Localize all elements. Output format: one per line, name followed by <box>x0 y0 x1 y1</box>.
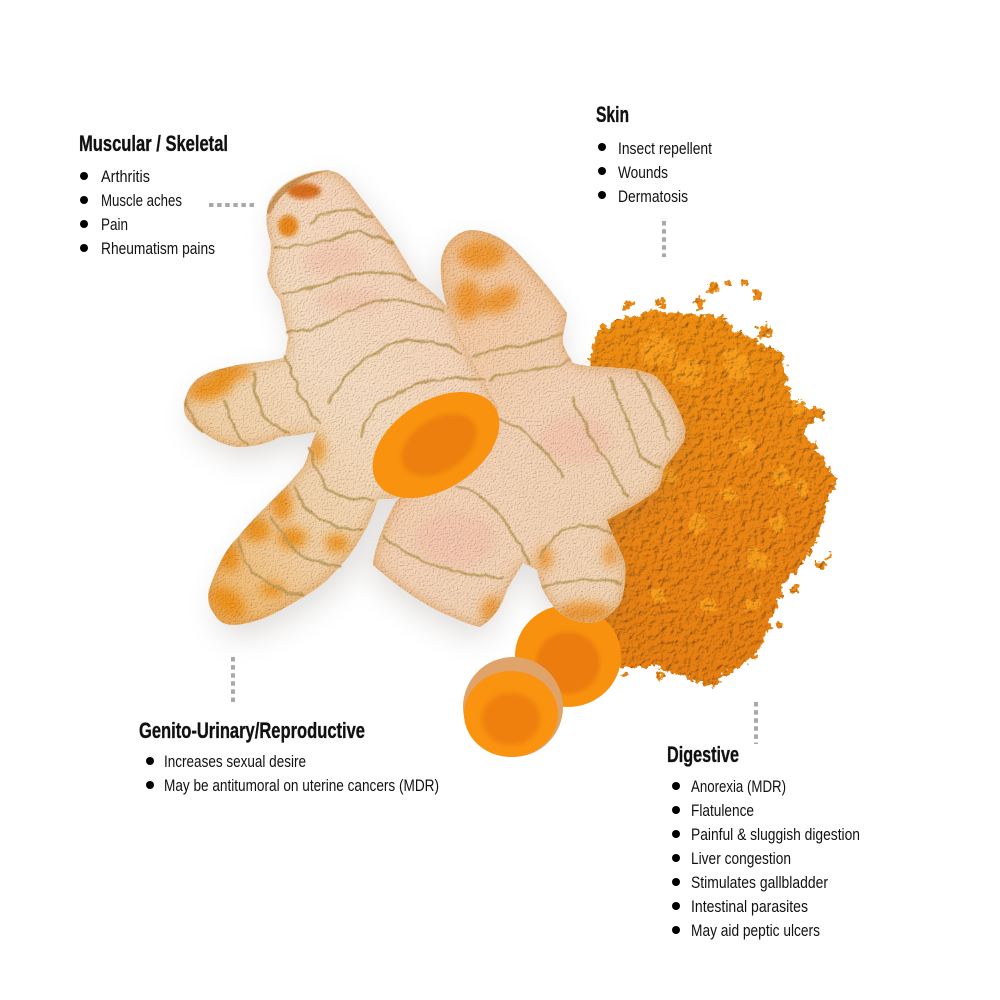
top spots <box>267 171 327 237</box>
connector: genito-urinary <box>231 657 235 702</box>
connector: muscular <box>209 203 254 207</box>
list: digestive items: Liver congestion <box>691 849 791 868</box>
list: genito-urinary items <box>146 752 439 795</box>
connector: skin <box>662 221 666 257</box>
orange patches <box>185 244 384 624</box>
orange patches <box>415 240 616 623</box>
turmeric slice: front <box>463 657 563 757</box>
text block: muscular / skeletal <box>79 131 228 258</box>
connector: digestive <box>754 702 758 744</box>
list: muscular items: Muscle aches <box>101 191 182 210</box>
heading: digestive: Digestive <box>667 742 739 767</box>
growth rings <box>383 333 670 587</box>
text block: skin <box>596 102 712 206</box>
text block: genito-urinary / reproductive <box>139 718 439 795</box>
rhizome: right root <box>373 230 685 627</box>
list: skin items: Insect repellent <box>618 139 712 158</box>
list: skin items <box>598 139 712 206</box>
list: digestive items <box>672 777 860 940</box>
list: digestive items: Flatulence <box>691 801 754 820</box>
list: muscular items: Pain <box>101 215 128 234</box>
soft shadows <box>190 182 683 639</box>
list: digestive items: Intestinal parasites <box>691 897 808 916</box>
rhizome: left root <box>184 170 498 625</box>
powder clumps <box>640 329 811 614</box>
rhizome: cut face <box>353 370 519 520</box>
heading: muscular / skeletal: Muscular / Skeletal <box>79 131 228 156</box>
turmeric powder pile <box>587 279 837 687</box>
turmeric slice: back <box>515 605 621 707</box>
powder specks <box>622 279 833 678</box>
list: muscular items: Rheumatism pains <box>101 239 215 258</box>
list: muscular items <box>80 167 215 258</box>
list: muscular items: Arthritis <box>101 167 150 186</box>
list: genito-urinary items: May be antitumoral on uterine cancers (MDR) <box>164 776 439 795</box>
heading: skin: Skin <box>596 102 629 127</box>
list: skin items: Wounds <box>618 163 668 182</box>
list: skin items: Dermatosis <box>618 187 688 206</box>
list: digestive items: May aid peptic ulcers <box>691 921 820 940</box>
text block: digestive <box>667 742 860 940</box>
list: digestive items: Painful & sluggish digestion <box>691 825 860 844</box>
heading: genito-urinary / reproductive: Genito-Urinary/Reproductive <box>139 718 365 743</box>
list: genito-urinary items: Increases sexual desire <box>164 752 306 771</box>
growth rings <box>187 210 483 597</box>
list: digestive items: Stimulates gallbladder <box>691 873 828 892</box>
list: digestive items: Anorexia (MDR) <box>691 777 786 796</box>
